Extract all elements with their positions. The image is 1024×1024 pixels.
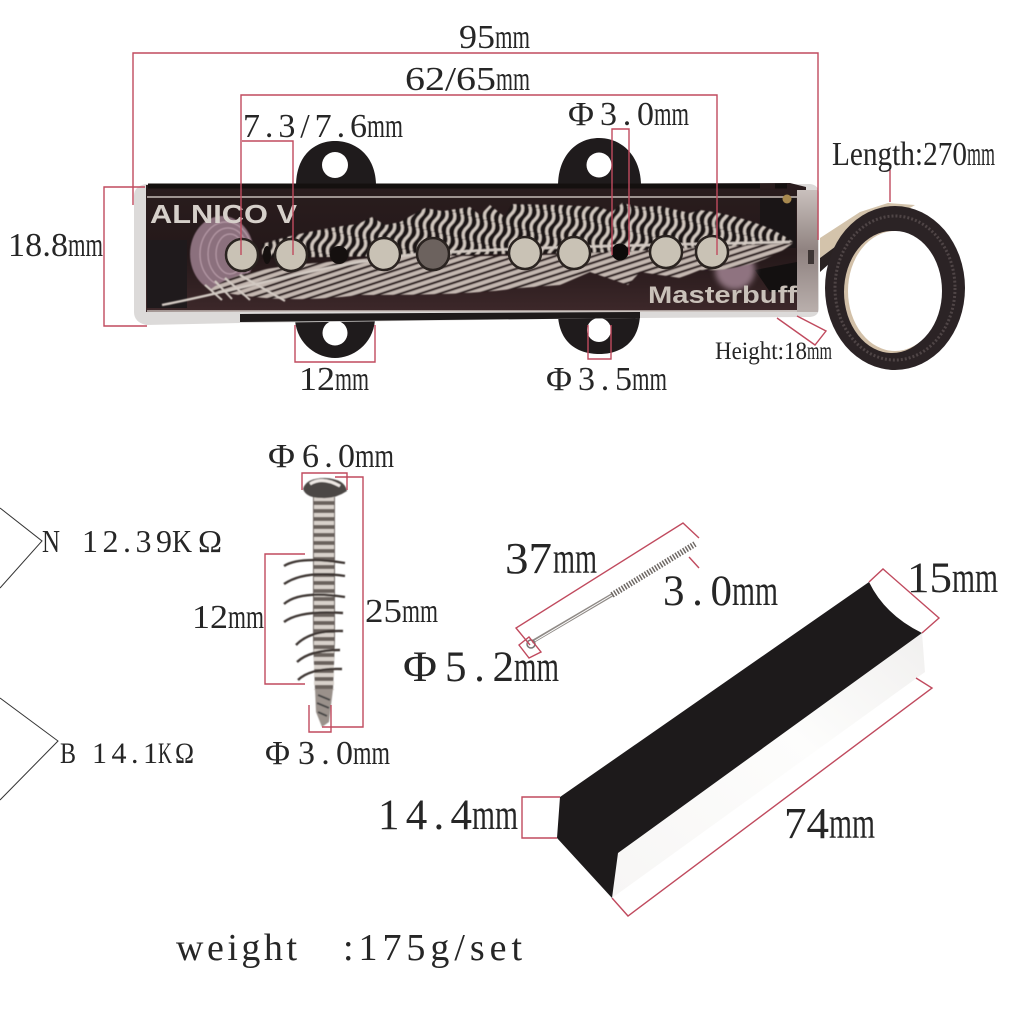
mounting lugs xyxy=(295,138,641,358)
label: 14.4mm xyxy=(378,792,518,839)
label: diameter 3.0mm top: Φ xyxy=(568,96,594,133)
feather xyxy=(162,203,793,305)
label: 18.8mm: mm xyxy=(68,227,103,264)
label: 37mm: 37 xyxy=(505,534,552,583)
label: 18.8mm: 18.8 xyxy=(8,227,68,264)
label: B resistance: 14.1 xyxy=(92,737,158,770)
label: 62/65mm: mm xyxy=(496,61,530,98)
label: 74mm: 74 xyxy=(784,799,829,848)
label: 12mm spring: mm xyxy=(228,599,264,636)
label: B resistance xyxy=(60,737,194,770)
label: N resistance: K xyxy=(172,523,192,559)
label: 12mm lug xyxy=(299,361,369,398)
label: diameter 6.0mm: mm xyxy=(355,438,394,475)
label: diameter 3.0mm bottom xyxy=(265,735,390,772)
label: 62/65mm: 62/65 xyxy=(405,61,496,98)
label: 7.3/7.6mm: mm xyxy=(367,108,403,145)
label: diameter 3.0mm bottom: Φ xyxy=(265,735,290,772)
label: N resistance xyxy=(42,523,222,559)
dimension lines: foam wedge xyxy=(522,569,939,916)
label: 14.4mm: mm xyxy=(472,792,518,839)
label: 37mm xyxy=(505,534,597,583)
label: B resistance: B xyxy=(60,737,76,770)
label: N resistance: Ω xyxy=(198,523,222,559)
resistance brackets xyxy=(0,508,58,800)
label: 15mm: 15 xyxy=(907,555,952,602)
tape coil xyxy=(820,203,965,370)
label: 25mm xyxy=(365,593,438,630)
label: N resistance: 12.39 xyxy=(82,523,172,559)
label: diameter 5.2mm: mm xyxy=(514,644,559,691)
label: weight: weight xyxy=(176,927,297,969)
label: 3.0mm: mm xyxy=(732,568,778,615)
label: 14.4mm: 14.4 xyxy=(378,792,472,839)
label: diameter 3.5mm: Φ xyxy=(546,361,572,398)
mounting screw with spring xyxy=(284,478,347,727)
dimension lines: long screw xyxy=(516,523,699,658)
label: 7.3/7.6mm: 7.3/7.6 xyxy=(243,108,367,145)
label: 15mm: mm xyxy=(952,555,998,602)
pole pieces xyxy=(226,236,728,271)
label: diameter 3.0mm top: mm xyxy=(654,96,689,133)
pickup illustration xyxy=(134,138,819,358)
label: diameter 6.0mm: Φ xyxy=(268,438,295,475)
label: diameter 3.5mm: mm xyxy=(632,361,667,398)
dimension lines: mounting screw xyxy=(265,473,363,732)
label: diameter 3.0mm bottom: 3.0 xyxy=(298,735,353,772)
label: 12mm spring xyxy=(192,599,264,636)
label: 62/65mm xyxy=(405,61,530,98)
label: weight xyxy=(176,927,522,969)
long screw xyxy=(527,544,695,648)
foam wedge xyxy=(557,582,925,898)
label: diameter 6.0mm xyxy=(268,438,394,475)
clear cover xyxy=(134,184,819,325)
label: 74mm xyxy=(784,799,875,848)
label: B resistance: Ω xyxy=(175,737,194,770)
label: 95mm xyxy=(459,19,530,56)
label: 25mm: mm xyxy=(402,593,438,630)
label: diameter 3.5mm: 3.5 xyxy=(578,361,632,398)
label: 18.8mm xyxy=(8,227,103,264)
label: 74mm: mm xyxy=(829,799,875,848)
label: 37mm: mm xyxy=(553,534,597,583)
label: diameter 5.2mm xyxy=(403,644,559,691)
brand text: ALNICO V xyxy=(150,199,298,229)
label: 3.0mm: 3.0 xyxy=(663,568,732,615)
label: 12mm lug: 12 xyxy=(299,361,335,398)
label: 12mm lug: mm xyxy=(335,361,369,398)
label: diameter 6.0mm: 6.0 xyxy=(302,438,355,475)
label: diameter 5.2mm: 5.2 xyxy=(445,644,514,691)
label: weight: :175g/set xyxy=(343,927,522,969)
label: length 270mm: mm xyxy=(967,136,995,173)
label: 12mm spring: 12 xyxy=(192,599,228,636)
label: 95mm: mm xyxy=(495,19,530,56)
label: length 270mm: Length:270 xyxy=(832,136,967,173)
label: 15mm xyxy=(907,555,998,602)
label: 95mm: 95 xyxy=(459,19,495,56)
label: diameter 5.2mm: Φ xyxy=(403,644,437,691)
label: height 18mm: Height:18 xyxy=(715,338,807,365)
label: diameter 3.5mm xyxy=(546,361,667,398)
dimension lines: pickup xyxy=(104,53,890,362)
label: 3.0mm xyxy=(663,568,778,615)
label: N resistance: N xyxy=(42,523,60,559)
pickup illustration: Masterbuff xyxy=(648,282,798,309)
label: 25mm: 25 xyxy=(365,593,402,630)
label: diameter 3.0mm bottom: mm xyxy=(353,735,390,772)
label: height 18mm: mm xyxy=(807,338,832,365)
label: diameter 3.0mm top: 3.0 xyxy=(600,96,654,133)
label: diameter 3.0mm top xyxy=(568,96,689,133)
label: B resistance: K xyxy=(158,737,172,770)
